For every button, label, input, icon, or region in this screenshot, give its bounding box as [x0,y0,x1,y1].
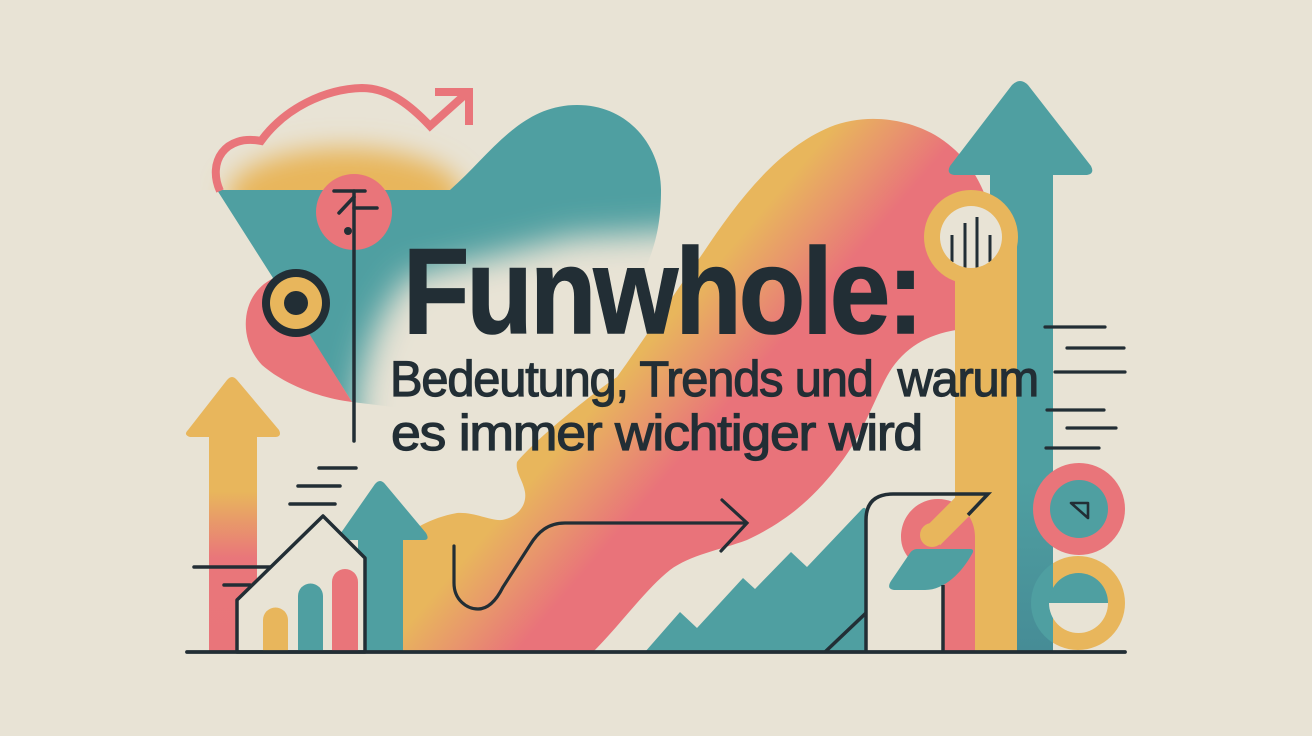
speed lines left [194,468,356,585]
bar: teal [298,584,323,651]
coral blob behind target [246,279,352,402]
baseline [187,650,1125,654]
infographic illustration [185,81,1127,654]
bar: yellow [263,608,288,651]
teal mountain chart [645,508,866,652]
coral circle with antenna icon [316,174,392,441]
teal funnel shape with faded edge [217,105,661,420]
sun glow under cloud [212,130,470,190]
subtitle line 2: es immer wichtiger wird [391,405,922,461]
coral column and circle [901,499,975,652]
panel outline [866,494,988,652]
teal arrow [336,481,428,652]
gradient blob: coral and yellow [403,119,985,652]
coral ring icon [1033,463,1125,555]
large teal arrow [949,81,1092,652]
diagonal line at mountain [825,613,866,652]
speed lines right [1045,327,1125,448]
yellow ring icon [1031,556,1125,650]
arrow head [721,500,747,551]
yellow column with circle [924,190,1018,652]
yellow diagonal band [920,491,978,547]
teal leaf [889,549,973,590]
left yellow arrow [186,377,280,652]
icon: target circle [262,269,330,337]
subtitle [390,351,1038,461]
cloud outline arrow [216,88,469,191]
title: Funwhole: [403,223,921,359]
panel with coral and leaf [866,491,988,652]
subtitle line 1: Bedeutung, Trends und warum [390,351,1038,407]
shaded teal shaft lower section [1017,480,1053,652]
arrow head [435,92,469,125]
curve arrow [454,500,747,609]
panel fill [866,494,955,652]
house outline with bars [237,516,365,652]
bar: coral [332,569,358,651]
mini bars [952,217,990,270]
